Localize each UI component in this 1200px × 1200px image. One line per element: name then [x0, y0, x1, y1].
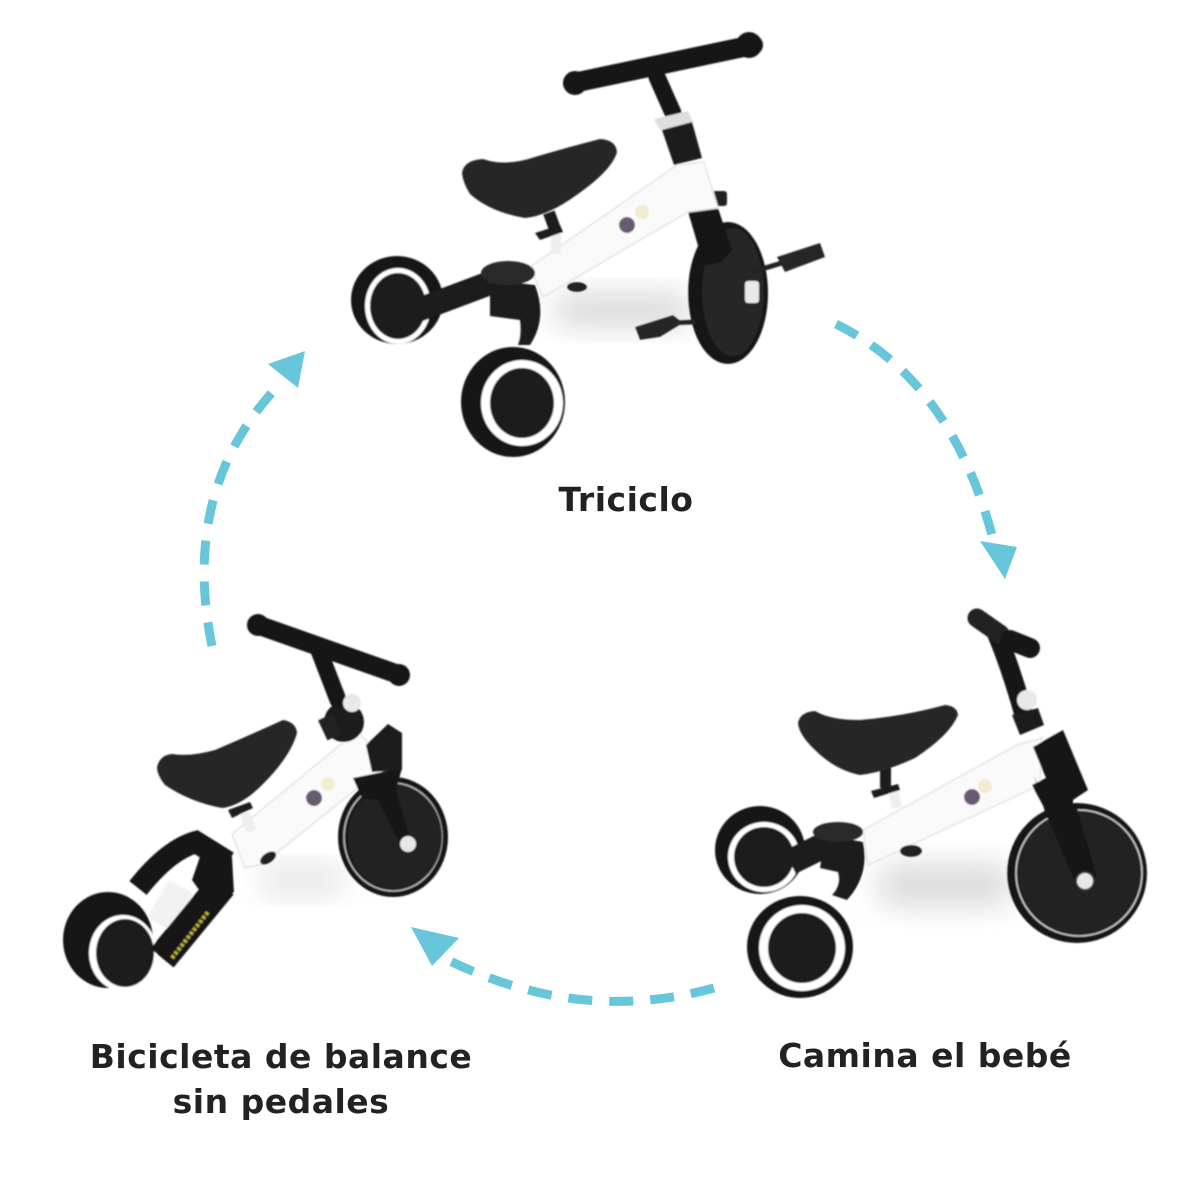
rear left wheel	[351, 256, 443, 344]
handlebar	[563, 32, 762, 95]
rear wheel	[63, 892, 157, 991]
knob	[1017, 690, 1037, 710]
front wheel	[338, 777, 448, 897]
product: baby walker	[715, 618, 1147, 998]
second rear wheel	[461, 347, 565, 457]
knob	[343, 694, 361, 712]
label: balance bike	[90, 1037, 472, 1121]
stem	[318, 648, 338, 700]
clamp with knob	[318, 702, 364, 742]
sticker	[306, 777, 335, 806]
label: balance bike: Bicicleta de balance	[90, 1037, 472, 1076]
clamp	[1012, 708, 1044, 735]
fork bracket	[366, 724, 402, 772]
seat clamp	[228, 802, 256, 833]
stem	[657, 77, 673, 113]
seat	[462, 139, 617, 218]
front wheel	[1007, 803, 1147, 943]
front fork	[1034, 775, 1097, 884]
left pedal	[635, 315, 695, 340]
front fork	[687, 205, 732, 266]
product: tricycle	[351, 32, 825, 457]
rear left wheel	[715, 806, 805, 894]
handlebar	[977, 618, 1030, 648]
ground shadow	[880, 865, 1010, 905]
label: baby walker: Camina el bebé	[778, 1036, 1072, 1075]
clamp	[654, 111, 694, 130]
fork knob	[712, 191, 727, 206]
sticker	[964, 779, 992, 805]
product: balance bike	[63, 614, 448, 991]
arrow: tricycle to baby walker	[836, 324, 1017, 579]
axle	[1076, 872, 1094, 890]
ground shadow	[262, 868, 342, 892]
fork bracket	[1032, 730, 1088, 815]
label: tricycle: Triciclo	[559, 480, 693, 519]
second rear wheel	[747, 896, 853, 998]
ground shadow	[555, 295, 690, 325]
frame foot	[900, 845, 922, 857]
stem	[995, 630, 1024, 715]
white frame	[232, 731, 390, 868]
front wheel	[688, 222, 768, 364]
seat clamp	[535, 210, 563, 254]
front fork	[353, 768, 412, 848]
label: balance bike: sin pedales	[173, 1082, 389, 1121]
rear assembly	[138, 842, 234, 958]
rear arm	[790, 840, 835, 862]
hinge	[481, 261, 540, 345]
hinge	[813, 822, 865, 900]
arrow: baby walker to balance bike	[411, 927, 714, 1001]
white frame	[530, 162, 718, 297]
frame foot	[258, 849, 278, 867]
frame foot	[567, 282, 587, 292]
head tube	[662, 122, 702, 165]
right pedal	[752, 243, 825, 272]
seat	[798, 705, 958, 775]
handlebar	[247, 614, 410, 686]
arrow: balance bike to tricycle	[204, 351, 305, 646]
axle	[400, 836, 416, 852]
white frame	[863, 738, 1042, 865]
sticker	[619, 205, 649, 233]
seat clamp	[871, 768, 902, 809]
rear arm	[418, 283, 490, 310]
seat	[157, 720, 297, 808]
